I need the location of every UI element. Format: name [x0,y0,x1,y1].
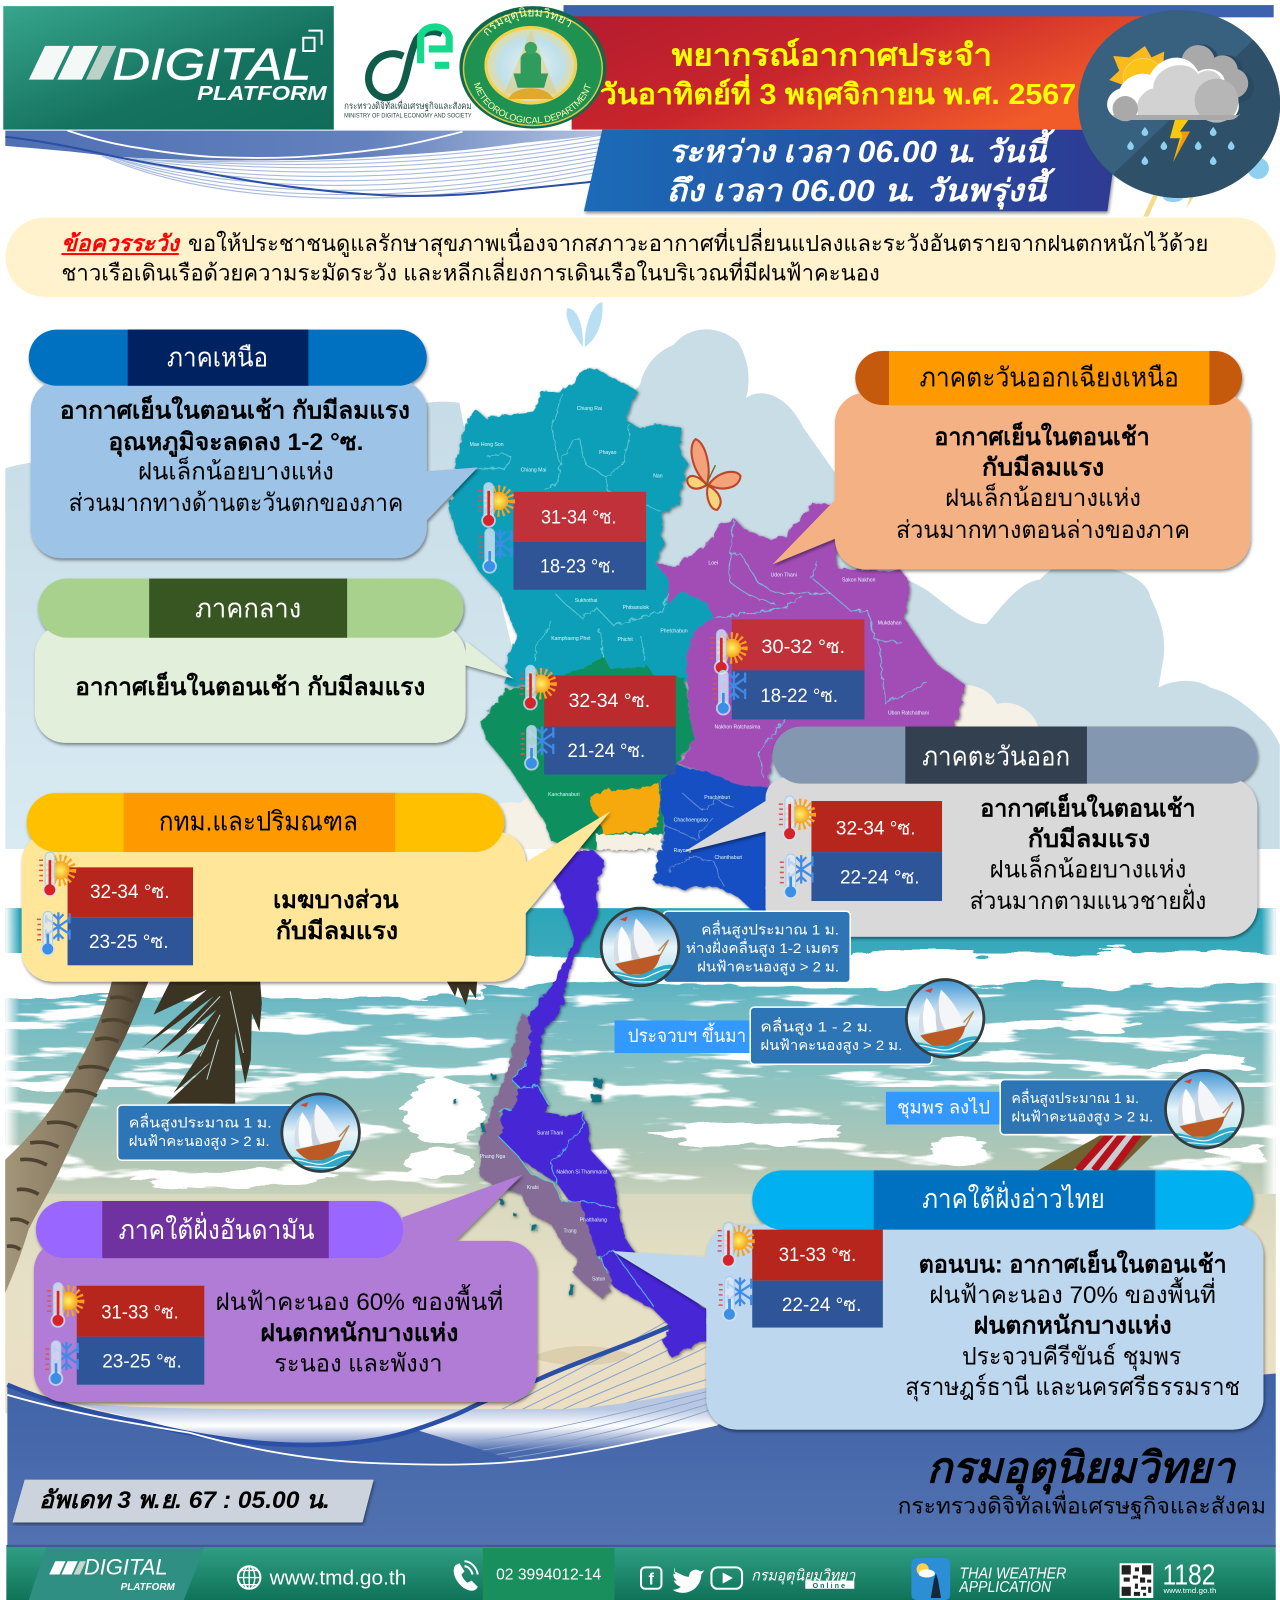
map temperature: central [520,665,676,774]
background: pale clouds [5,329,1280,849]
panel: east: กับมีลมแรง [1028,825,1150,853]
header: meteorological department seal: METEOROLOGICAL DEPARTMENT [474,82,591,124]
map temperature: central: 21-24 °ซ. [568,740,645,762]
map: province name labels: Rayong [674,848,691,854]
panel: southern gulf coast: ประจวบคีรีขันธ์ ชุมพร [962,1342,1181,1371]
panel: southern gulf coast: ฝนฟ้าคะนอง 70% ของพื้นที่ [929,1277,1216,1309]
footer: phone [454,1548,614,1600]
heading: north [29,330,427,386]
footer: weather app: APPLICATION [958,1579,1052,1596]
map: province name labels: Nan [653,474,663,480]
heading: Bangkok [27,793,504,852]
panel: north: อุณหภูมิจะลดลง 1-2 °ซ. [108,429,363,458]
map: province name labels: Udon Thani [771,573,797,579]
panel: east: ฝนเล็กน้อยบางแห่ง [989,854,1186,884]
heading: southern Andaman coast [36,1201,403,1258]
panel: northeast: ส่วนมากทางตอนล่างของภาค [896,517,1190,544]
warning notice [5,217,1276,297]
sea forecast: upper gulf: ห่างฝั่งคลื่นสูง 1-2 เมตร [686,938,839,957]
header: red title banner [572,16,1143,130]
department name [898,1445,1266,1519]
map: province name labels: Mukdahan [878,620,902,626]
footer: QR code and hotline: 1182 [1162,1560,1216,1592]
footer: social icons: กรมอุตุนิยมวิทยา [751,1568,856,1585]
footer: weather app: THAI WEATHER [959,1566,1067,1583]
panel: southern gulf coast [612,1170,1263,1430]
footer: social icons: f [649,1571,655,1589]
decorative butterfly, orange [687,439,741,510]
map: province name labels: Nakhon Ratchasima [714,725,761,731]
header: ministry logo: กระทรวงดิจิทัลเพื่อเศรษฐกิจและสังคม [344,99,472,112]
icon: storm cloud in circle [1078,10,1280,217]
panel: east: อากาศเย็นในตอนเช้า [980,792,1196,822]
map: province name labels: Phitsanulok [623,605,649,611]
panel: southern gulf coast: 22-24 °ซ. [782,1294,861,1316]
panel: central [35,579,513,743]
update timestamp: อัพเดท 3 พ.ย. 67 : 05.00 น. [39,1487,330,1514]
panel: central: อากาศเย็นในตอนเช้า กับมีลมแรง [75,671,425,701]
map: province name labels: Trang [563,1229,577,1235]
sea forecast: Chumphon southward [886,1070,1245,1150]
heading: northeast: ภาคตะวันออกเฉียงเหนือ [920,363,1179,393]
panel: north [29,330,478,558]
map: province name labels: Phayao [599,450,617,456]
heading: central: ภาคกลาง [195,593,301,623]
map temperature: north [478,483,646,590]
panel: Bangkok and vicinity: กับมีลมแรง [276,917,398,945]
header: red title banner: วันอาทิตย์ที่ 3 พฤศจิกายน พ.ศ. 2567 [600,74,1076,111]
sea forecast: Andaman: คลื่นสูงประมาณ 1 ม. [129,1113,272,1132]
map: province name labels: Prachinburi [704,795,730,801]
panel: southern Andaman coast: 23-25 °ซ. [102,1350,182,1372]
heading: north: ภาคเหนือ [167,342,268,372]
map: north, central, northeast, east, Bangkok [447,367,963,911]
header: blue time banner: ระหว่าง เวลา 06.00 น. วันนี้ [669,129,1055,169]
background: beach chair [1038,1132,1153,1170]
map: province name labels: Phatthalung [580,1217,607,1223]
map: province name labels: Satun [592,1277,606,1283]
footer: website: www.tmd.go.th [269,1568,406,1590]
map: province name labels: Sukhothai [575,598,597,604]
map temperature: north: 31-34 °ซ. [541,506,617,528]
map: province name labels: Krabi [527,1185,539,1191]
panel: southern Andaman coast: ฝนตกหนักบางแห่ง [260,1320,458,1347]
heading: east: ภาคตะวันออก [922,741,1070,771]
header: meteorological department seal [459,6,606,129]
footer: digital platform logo [29,1547,204,1600]
background: bottom blue wave [7,1310,1276,1547]
footer: QR code and hotline [1120,1560,1217,1598]
sea forecast: Chumphon southward: ฝนฟ้าคะนองสูง > 2 ม. [1011,1109,1153,1125]
background: sandy beach [5,1194,1276,1413]
panel: east [684,727,1257,937]
heading: central [38,579,463,638]
header: blue time banner: ถึง เวลา 06.00 น. วันพรุ่งนี้ [667,168,1056,210]
background: sea with foam [0,908,1280,1286]
warning notice: ข้อควรระวัง [61,231,181,256]
sea forecast: upper gulf: ฝนฟ้าคะนองสูง > 2 ม. [697,959,839,975]
panel: southern Andaman coast: ฝนฟ้าคะนอง 60% ของพื้นที่ [216,1284,503,1316]
map: province name labels: Surat Thani [537,1131,563,1137]
map: province name labels: Kamphaeng Phet [551,636,591,642]
panel: north: อากาศเย็นในตอนเช้า กับมีลมแรง [60,394,410,424]
map: province name labels: Phang Nga [480,1154,505,1160]
footer: social icons [641,1567,856,1593]
footer bar [6,1545,1276,1600]
map: southern peninsula [452,849,707,1356]
footer: phone: 02 3994012-14 [496,1567,602,1584]
map: province name labels: Chanthaburi [714,855,742,861]
background: palm tree [5,981,477,1293]
panel: southern Andaman coast: ระนอง และพังงา [274,1350,443,1377]
map: province name labels: Kanchanaburi [548,792,580,798]
background: ragged white foam bands [0,918,1280,1206]
header: ministry logo [334,7,487,130]
map temperature: northeast: 18-22 °ซ. [760,685,838,707]
heading: southern Andaman coast: ภาคใต้ฝั่งอันดามัน [119,1212,314,1245]
sea forecast: Prachuap northward: ประจวบฯ ขึ้นมา [628,1022,746,1046]
header: digital platform logo panel: PLATFORM [197,83,328,105]
sea forecast: Chumphon southward: ชุมพร ลงไป [897,1096,990,1119]
sea forecast: Andaman [118,1094,361,1173]
footer: QR code and hotline: www.tmd.go.th [1162,1587,1217,1595]
map: province name labels: Nakhon Si Thammarat [556,1169,608,1175]
heading: southern gulf coast [752,1170,1253,1230]
map: province name labels: Phichit [618,637,633,643]
header: ministry logo: MINISTRY OF DIGITAL ECONOMY AND SOCIETY [344,112,472,119]
decorative butterfly, pale blue [566,302,603,347]
footer: digital platform logo: DIGITAL [84,1554,168,1579]
map: province name labels: Ubon Ratchathani [888,710,929,716]
panel: southern gulf coast: 31-33 °ซ. [779,1244,856,1266]
panel: southern gulf coast: ตอนบน: อากาศเย็นในตอนเช้า [919,1248,1227,1278]
panel: north: ส่วนมากทางด้านตะวันตกของภาค [69,490,403,517]
heading: Bangkok: กทม.และปริมณฑล [159,807,358,837]
panel: east: 22-24 °ซ. [840,867,920,889]
sea forecast: Prachuap northward: ฝนฟ้าคะนองสูง > 2 ม. [760,1038,902,1054]
header: top blue strip [563,5,1274,17]
map temperature: northeast [710,619,864,719]
department name: กรมอุตุนิยมวิทยา [927,1445,1237,1495]
footer: weather app [911,1558,1067,1600]
map: province name labels: Chiang Rai [577,406,602,412]
sea forecast: Andaman: ฝนฟ้าคะนองสูง > 2 ม. [129,1134,270,1150]
heading: northeast [855,351,1242,405]
department name: กระทรวงดิจิทัลเพื่อเศรษฐกิจและสังคม [898,1489,1266,1519]
map: province name labels: Mae Hong Son [470,442,504,448]
panel: northeast: อากาศเย็นในตอนเช้า [934,421,1150,451]
heading: east [773,727,1257,784]
map: province name labels: Chiang Mai [521,467,546,473]
header: digital platform logo panel: DIGITAL [112,39,311,90]
panel: east: 32-34 °ซ. [836,818,916,840]
map temperature: central: 32-34 °ซ. [569,690,650,712]
panel: Bangkok and vicinity [22,793,610,982]
footer: social icons: Online [813,1582,847,1590]
footer: digital platform logo: PLATFORM [121,1582,175,1593]
heading: southern gulf coast: ภาคใต้ฝั่งอ่าวไทย [922,1181,1105,1214]
map: province name labels: Chachoengsao [674,817,708,823]
header: swoosh lines [5,131,609,198]
panel: northeast: ฝนเล็กน้อยบางแห่ง [945,482,1141,512]
map: province name labels: Phetchabun [660,629,688,635]
warning notice: ชาวเรือเดินเรือด้วยความระมัดระวัง และหลีกเลี่ยงการเดินเรือในบริเวณที่มีฝนฟ้าคะนอง [61,257,880,286]
warning notice: ขอให้ประชาชนดูแลรักษาสุขภาพเนื่องจากสภาวะอากาศที่เปลี่ยนแปลงและระวังอันตรายจากฝนตกหนักไว้ด้วย [188,227,1208,257]
panel: northeast [773,351,1250,569]
map: province name labels: Sakon Nakhon [842,578,876,584]
panel: southern gulf coast: ฝนตกหนักบางแห่ง [974,1313,1172,1340]
panel: southern Andaman coast: 31-33 °ซ. [101,1301,179,1323]
map: province name labels [470,406,929,1283]
header: digital platform logo panel [3,6,334,130]
map temperature: northeast: 30-32 °ซ. [761,636,845,658]
sea forecast: Prachuap northward [614,980,986,1064]
header: blue time banner [584,129,1119,211]
panel: Bangkok and vicinity: 32-34 °ซ. [90,881,170,903]
sea forecast: upper gulf: คลื่นสูงประมาณ 1 ม. [701,920,839,939]
panel: northeast: กับมีลมแรง [982,454,1104,482]
map temperature: north: 18-23 °ซ. [540,555,616,577]
map of Thailand [447,367,963,1356]
panel: Bangkok and vicinity: เมฆบางส่วน [273,887,399,914]
panel: east: ส่วนมากตามแนวชายฝั่ง [970,884,1206,915]
header: meteorological department seal: กรมอุตุนิยมวิทยา [484,7,572,36]
map: province name labels: Loei [708,560,718,566]
sea forecast: upper gulf [599,908,850,988]
panel: southern gulf coast: สุราษฎร์ธานี และนครศรีธรรมราช [905,1373,1240,1402]
header: red title banner: พยากรณ์อากาศประจำ [672,37,992,72]
sea forecast: Chumphon southward: คลื่นสูงประมาณ 1 ม. [1011,1088,1139,1107]
sea forecast: Prachuap northward: คลื่นสูง 1 - 2 ม. [760,1017,873,1036]
update timestamp [12,1480,374,1522]
panel: north: ฝนเล็กน้อยบางแห่ง [138,456,334,486]
panel: Bangkok and vicinity: 23-25 °ซ. [89,931,169,953]
panel: southern Andaman coast [34,1174,537,1402]
